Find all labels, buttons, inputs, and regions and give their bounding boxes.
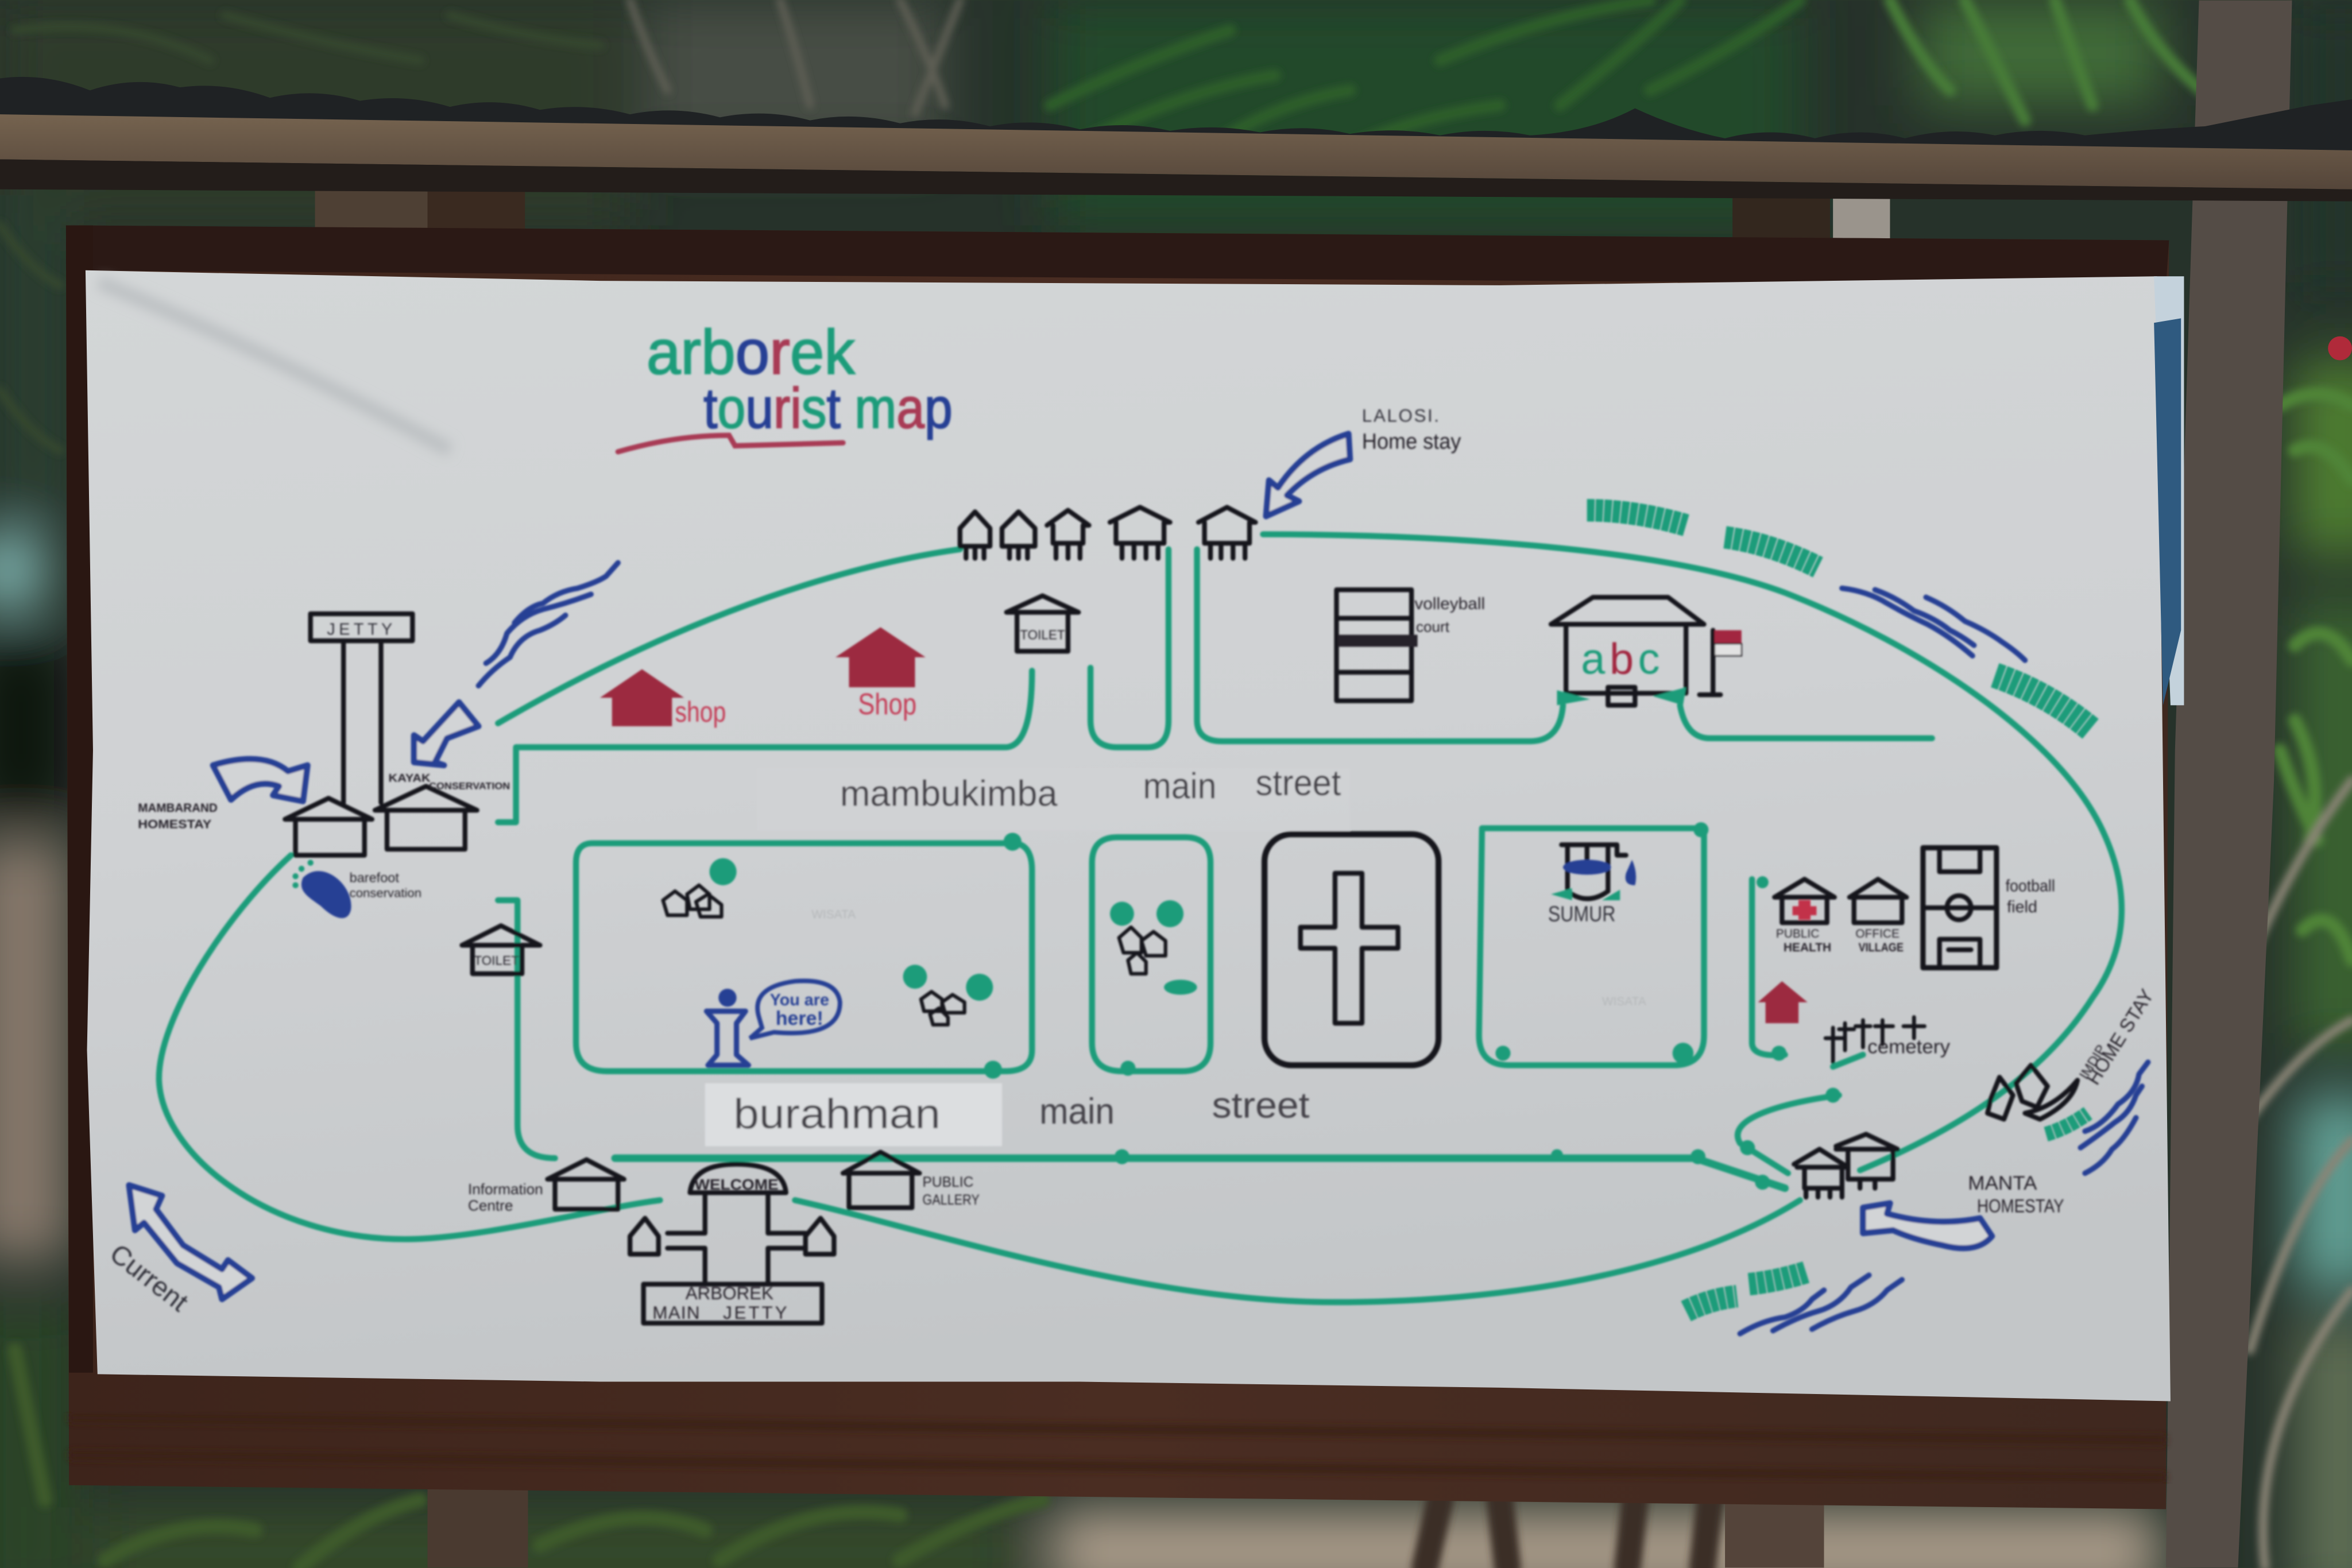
mambarano house	[285, 798, 372, 855]
label: kayak conservation	[389, 772, 510, 792]
title: arborek	[647, 318, 856, 388]
faded stamp 2: WISATA	[1602, 995, 1646, 1008]
road label: mambukimba main street: street	[1255, 763, 1341, 803]
road label: burahman main street: main	[1039, 1091, 1115, 1132]
school abc: c	[1638, 635, 1659, 683]
toilet top: TOILET	[1020, 627, 1065, 642]
you are here: here!	[776, 1008, 823, 1029]
lalosi label: LALOSI.	[1362, 406, 1441, 426]
arrow to kayak conservation	[414, 702, 478, 765]
volleyball court	[1337, 590, 1485, 701]
road label: mambukimba main street	[757, 763, 1350, 831]
shop 2: Shop	[858, 688, 916, 721]
imdip homestay: HOME STAY	[2082, 985, 2158, 1089]
tree cluster block 1	[663, 858, 737, 917]
lalosi label: Home stay	[1362, 430, 1461, 454]
waves bottom right	[1740, 1275, 1902, 1334]
current arrow	[129, 1185, 252, 1299]
manta homestay houses	[1794, 1134, 1897, 1197]
road label: burahman main street: burahman	[733, 1091, 941, 1137]
trees top right	[1587, 510, 2091, 729]
upper road: mambukimba	[498, 549, 1932, 822]
you are here	[706, 981, 840, 1065]
label: mambarano homestay: HOMESTAY	[138, 818, 211, 831]
lalosi arrow	[1266, 434, 1350, 516]
information centre: Centre	[468, 1197, 513, 1214]
manta label	[1968, 1172, 2064, 1216]
toilet left: TOILET	[474, 953, 519, 967]
volleyball court: volleyball	[1414, 595, 1485, 613]
barefoot conservation: conservation	[350, 887, 421, 900]
office village: VILLAGE	[1859, 941, 1904, 954]
cemetery	[1825, 1017, 1950, 1067]
jetty: JETTY	[327, 621, 396, 639]
right wooden pole	[2166, 1, 2292, 1567]
main jetty with welcome gate: MAIN	[652, 1303, 701, 1323]
public gallery: GALLERY	[923, 1193, 980, 1208]
posts	[315, 162, 1890, 1567]
stilt houses top	[960, 508, 1255, 558]
shop 1	[600, 669, 726, 728]
public health: HEALTH	[1784, 941, 1831, 954]
banner cloth	[86, 270, 2171, 1401]
well sumur	[1548, 845, 1636, 927]
label: kayak conservation: KAYAK	[389, 772, 431, 785]
lower road: burahman	[498, 900, 1840, 1190]
island outline	[159, 535, 2122, 1302]
main jetty with welcome gate: ARBOREK	[686, 1283, 773, 1303]
waves right	[2080, 1062, 2148, 1173]
information centre: Information	[468, 1180, 543, 1198]
waves upper left	[478, 563, 618, 686]
road label: burahman main street	[705, 1083, 1309, 1146]
road label: mambukimba main street: main	[1143, 766, 1217, 806]
barefoot conservation: barefoot	[350, 870, 399, 885]
manta label: MANTA	[1968, 1172, 2037, 1194]
school abc	[1551, 597, 1704, 705]
information centre	[468, 1160, 624, 1214]
shop 1: shop	[675, 696, 726, 728]
public gallery	[843, 1152, 980, 1208]
football field	[1923, 848, 2055, 968]
title: tourist map	[703, 377, 953, 440]
title	[618, 318, 953, 452]
sign board frame	[66, 225, 2169, 1509]
school abc: a	[1581, 635, 1606, 683]
main jetty with welcome gate	[630, 1164, 834, 1323]
manta arrow	[1863, 1203, 1992, 1248]
road label: mambukimba main street: mambukimba	[840, 773, 1058, 814]
shop 2	[835, 628, 926, 721]
public health	[1774, 879, 1835, 954]
label: mambarano homestay: MAMBARAND	[138, 802, 218, 815]
tree cluster block 2	[1110, 900, 1197, 995]
waves top right	[1842, 589, 2025, 660]
roof: corrugated sheet and beam	[0, 77, 2352, 202]
football field: field	[2007, 898, 2037, 916]
lalosi label	[1362, 406, 1461, 454]
flag	[1700, 630, 1742, 695]
football field: football	[2006, 877, 2055, 895]
manta label: HOMESTAY	[1977, 1195, 2064, 1216]
main jetty with welcome gate: JETTY	[723, 1303, 789, 1323]
you are here: You are	[770, 991, 829, 1009]
cloth creases	[99, 282, 450, 450]
church block with cross	[1264, 834, 1438, 1065]
volleyball court: court	[1416, 618, 1450, 635]
label: mambarano homestay	[138, 802, 218, 831]
public gallery: PUBLIC	[923, 1175, 973, 1190]
office village	[1850, 879, 1906, 954]
imdip homestay: IMDIP	[2076, 1042, 2109, 1082]
toilet left	[462, 926, 540, 974]
well sumur: SUMUR	[1548, 903, 1615, 927]
small red house	[1758, 981, 1808, 1023]
main jetty with welcome gate: WELCOME	[694, 1176, 779, 1193]
arrow to mambarano	[213, 759, 308, 802]
school abc: b	[1610, 635, 1634, 683]
kayak conservation house	[375, 786, 477, 849]
cemetery: cemetery	[1867, 1036, 1950, 1058]
faded stamp 1: WISATA	[811, 908, 856, 921]
label: kayak conservation: CONSERVATION	[429, 781, 510, 792]
bushes bottom right	[1686, 1272, 1806, 1311]
toilet top	[1007, 596, 1078, 651]
bushes near imdip	[2046, 1113, 2088, 1134]
current label: Current	[105, 1238, 194, 1317]
tree cluster block 1 right	[903, 965, 993, 1025]
blue edge print	[2154, 276, 2184, 705]
imdip homestay	[1987, 985, 2158, 1119]
public health: PUBLIC	[1776, 927, 1819, 940]
jetty	[311, 614, 412, 803]
road label: burahman main street: street	[1212, 1086, 1309, 1126]
green blocks	[576, 822, 1786, 1079]
barefoot conservation	[292, 860, 421, 918]
office village: OFFICE	[1855, 927, 1900, 940]
